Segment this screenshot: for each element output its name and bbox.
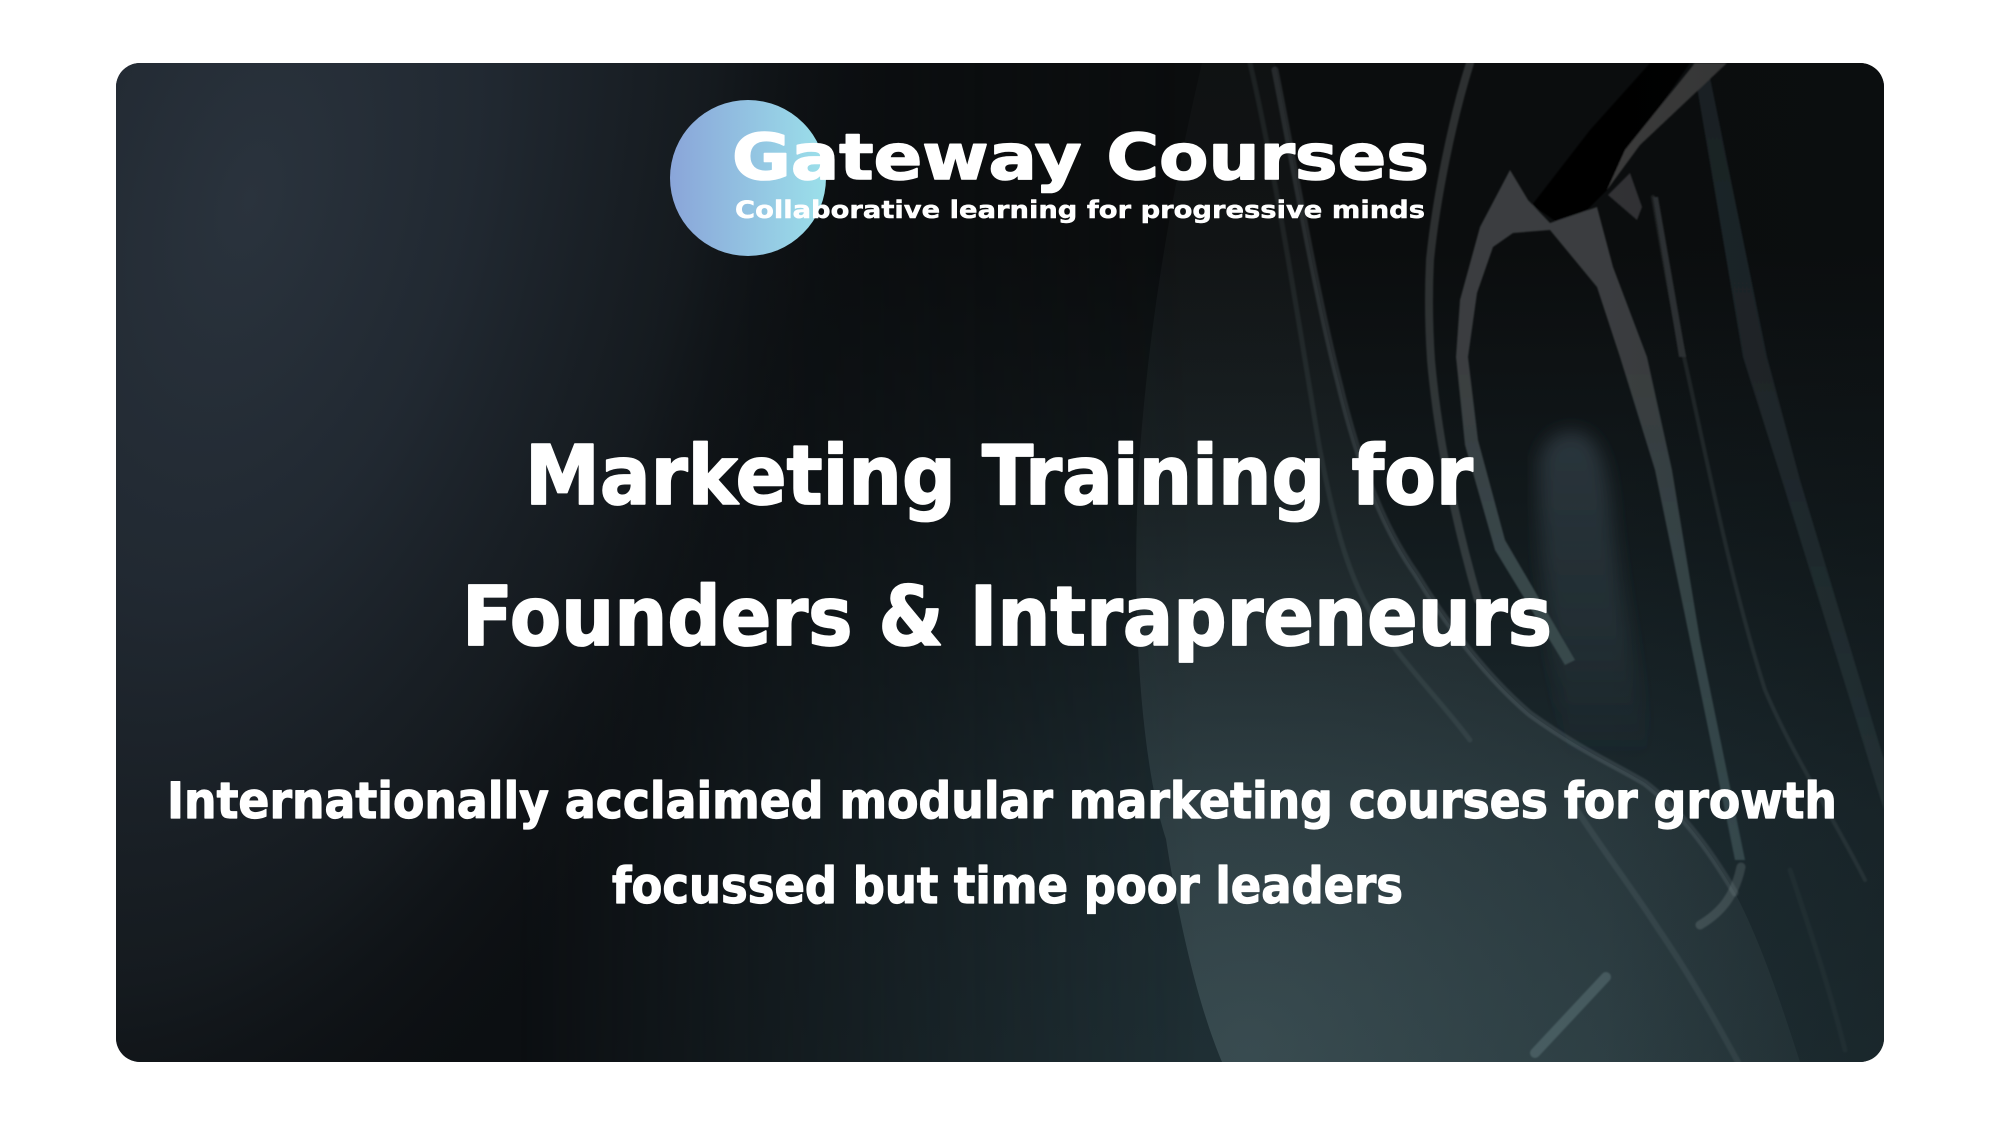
logo tagline: Collaborative learning for progressive minds	[735, 196, 1425, 224]
subtitle text block: focussed but time poor leaders	[612, 857, 1403, 915]
logo: Gateway Courses	[670, 100, 1429, 256]
logo wordmark: Gateway Courses	[732, 121, 1429, 194]
title	[462, 429, 1552, 665]
icon: gradient logo circle	[670, 100, 826, 256]
dark spike and gray arch at top	[1456, 63, 1884, 860]
title: Marketing Training for	[525, 429, 1474, 524]
title: Founders & Intrapreneurs	[462, 570, 1552, 665]
subtitle text block	[167, 772, 1837, 915]
subtitle text block: Internationally acclaimed modular marketing courses for growth	[167, 772, 1837, 830]
background artwork: abstract brush strokes	[1136, 63, 1884, 1062]
panel: dark hero card	[116, 63, 1884, 1062]
